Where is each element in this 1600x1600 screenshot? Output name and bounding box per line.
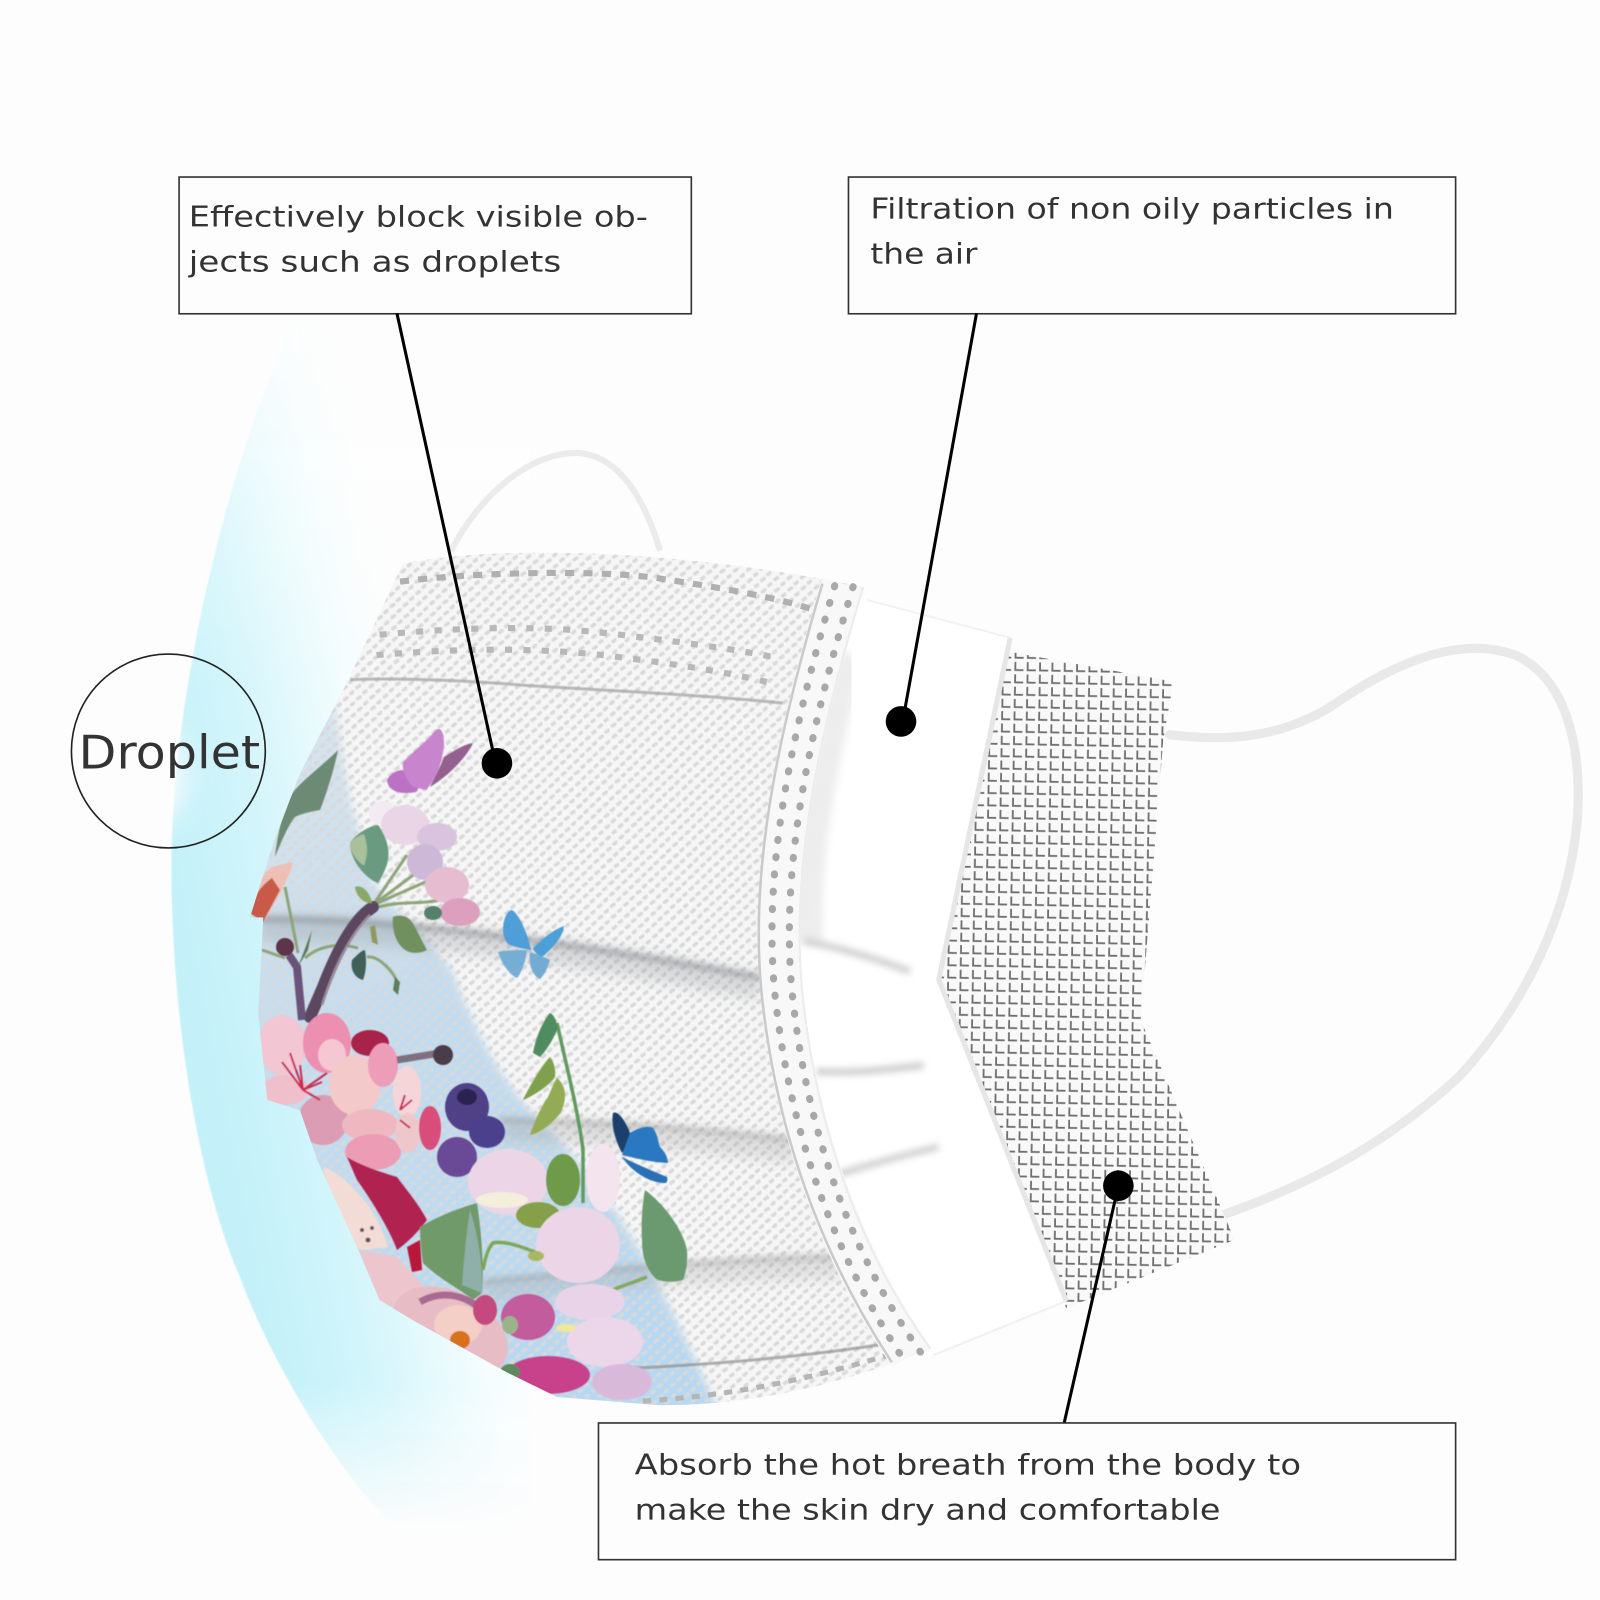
ear loop: right	[1169, 648, 1578, 1214]
mesh inner panel	[939, 651, 1235, 1308]
ear loop: top	[451, 453, 660, 551]
green leaves	[298, 825, 427, 995]
side stitched strip	[759, 584, 931, 1362]
pointer: outer layer	[397, 313, 512, 779]
pale blossoms upper	[369, 801, 480, 926]
cherry blossom large	[258, 1013, 398, 1145]
top stitch rows	[400, 573, 815, 610]
magenta bud	[501, 1294, 555, 1340]
crimson flower	[347, 1157, 427, 1272]
droplet label	[71, 654, 265, 848]
butterfly purple	[387, 729, 473, 793]
callout: absorb breath: make the skin dry and comfortable	[635, 1492, 1220, 1526]
butterfly blue	[498, 910, 564, 979]
pale flower low	[555, 1284, 652, 1400]
butterfly dark blue	[612, 1113, 668, 1183]
vine stems and leaves	[516, 1013, 583, 1228]
mesh grid texture	[939, 651, 1235, 1308]
cream speckled petal	[323, 1167, 388, 1250]
callout: block droplets	[179, 177, 691, 314]
watercolor wash	[235, 684, 719, 1418]
fabric weave	[235, 541, 888, 1418]
callout: absorb breath	[598, 1423, 1456, 1560]
callout: filtration	[848, 177, 1456, 314]
pale pink lower petal	[360, 1250, 427, 1310]
bottom stitch rows	[643, 1352, 898, 1401]
pale sweet pea	[483, 1144, 620, 1283]
pleat shadows	[350, 679, 783, 703]
pointer: middle layer	[886, 313, 977, 737]
magenta bud low	[500, 1356, 590, 1394]
purple flower	[437, 1083, 505, 1177]
callout: filtration: the air	[870, 236, 978, 270]
callout: block droplets: jects such as droplets	[188, 244, 561, 278]
inner white ear panel	[786, 597, 1066, 1357]
callout: filtration: Filtration of non oily particles in	[870, 191, 1394, 225]
coral petal	[250, 863, 293, 922]
branches	[276, 907, 373, 1020]
right leaf	[612, 1190, 687, 1290]
droplet label: Droplet	[79, 725, 260, 779]
pointer: inner layer	[1064, 1170, 1134, 1422]
branch stub	[397, 1045, 453, 1065]
pale tulip	[468, 1149, 548, 1215]
soft glow at droplet	[92, 719, 184, 832]
callout: absorb breath: Absorb the hot breath from the body to	[635, 1447, 1301, 1481]
floral print	[250, 750, 687, 1400]
cherry blossom right	[345, 1030, 441, 1170]
large green leaf	[420, 1203, 483, 1300]
pink rose	[393, 1286, 508, 1368]
stems	[262, 855, 440, 980]
mask front body	[235, 541, 931, 1418]
callout: block droplets: Effectively block visible ob-	[189, 200, 648, 234]
droplet blue crescent	[171, 395, 488, 1506]
leaf top left	[275, 750, 338, 857]
